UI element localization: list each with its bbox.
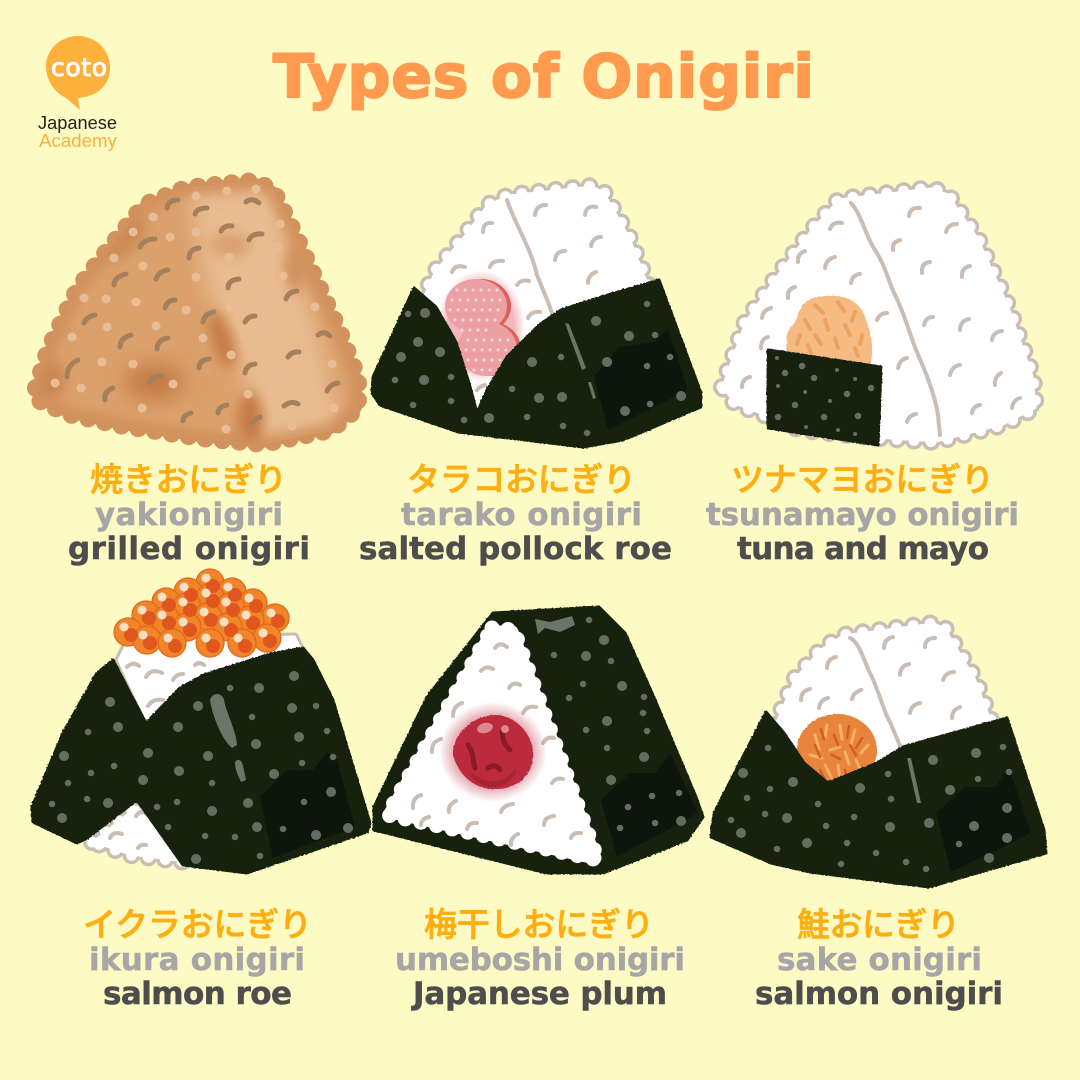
romaji: umeboshi onigiri [395, 942, 685, 978]
label: tarako [359, 461, 672, 567]
English: tuna and mayo [737, 531, 989, 567]
label: tsunamayo [706, 461, 1019, 567]
logo text Japanese: Japanese [38, 113, 117, 133]
label: yakionigiri [68, 461, 310, 567]
label: sake [755, 906, 1003, 1012]
title: Types of Onigiri [273, 42, 814, 112]
panel: grilled onigiri [20, 170, 380, 567]
illustration: ikura onigiri [32, 569, 370, 873]
panel: salted pollock roe [359, 186, 701, 567]
Japanese name: 梅干しおにぎり [424, 906, 654, 943]
romaji: yakionigiri [95, 497, 283, 533]
logo: coto Japanese Academy [38, 36, 117, 151]
panel: salmon roe [32, 569, 370, 1012]
rice triangle [387, 628, 598, 860]
romaji: sake onigiri [777, 942, 982, 978]
Japanese name: タラコおにぎり [407, 461, 636, 498]
salmon flakes [797, 714, 877, 786]
ikura roe pile [114, 569, 289, 657]
romaji: tarako onigiri [401, 497, 642, 533]
illustration: yakionigiri [20, 170, 380, 460]
illustration: tarako onigiri [372, 186, 701, 447]
illustration: sake onigiri [711, 623, 1046, 887]
tarako roe [437, 270, 525, 382]
label: umeboshi [395, 906, 685, 1012]
icon: speech bubble [46, 36, 110, 110]
illustration: umeboshi onigiri [374, 607, 703, 873]
tuna filling [786, 296, 872, 368]
romaji: ikura onigiri [89, 942, 305, 978]
illustration: tsunamayo onigiri [722, 188, 1036, 445]
English: salted pollock roe [359, 531, 672, 567]
English: salmon onigiri [755, 976, 1003, 1012]
logo text Academy: Academy [39, 131, 117, 151]
English: Japanese plum [411, 976, 667, 1012]
English: salmon roe [103, 976, 292, 1012]
umeboshi plum [439, 702, 547, 802]
Japanese name: 鮭おにぎり [797, 906, 960, 943]
Japanese name: イクラおにぎり [83, 906, 312, 943]
Japanese name: ツナマヨおにぎり [731, 461, 994, 498]
romaji: tsunamayo onigiri [706, 497, 1019, 533]
panel: tuna and mayo [706, 188, 1036, 567]
logo wordmark coto: coto [51, 53, 107, 82]
panel: salmon onigiri [711, 623, 1046, 1012]
English: grilled onigiri [68, 531, 310, 567]
Japanese name: 焼きおにぎり [90, 461, 287, 498]
label: ikura [83, 906, 312, 1012]
panel: Japanese plum [374, 607, 703, 1012]
